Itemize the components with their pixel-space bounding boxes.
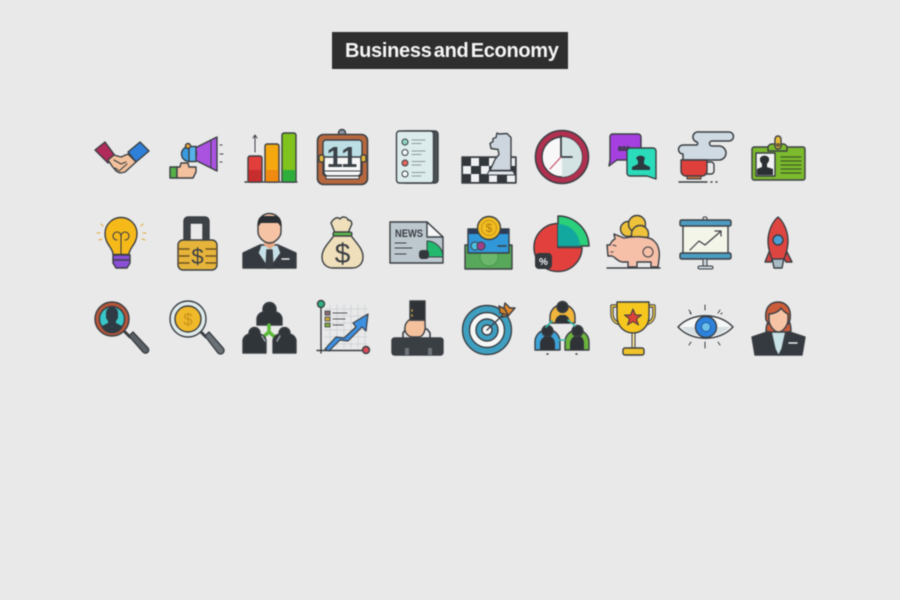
icon: light bulb — [97, 218, 146, 268]
icon: rocket — [765, 217, 792, 268]
icon: money bag — [322, 217, 363, 269]
icon: businesswoman — [752, 302, 805, 355]
icon: coffee cup — [679, 132, 734, 182]
icon: trophy — [612, 302, 654, 355]
row 2 icons — [97, 214, 792, 272]
icon: padlock — [178, 217, 217, 270]
dollar sign: $ — [183, 310, 193, 329]
icon: calendar — [318, 130, 368, 184]
icon: growth chart — [317, 300, 370, 354]
icon: credit card and cash — [465, 216, 512, 269]
icon: checklist — [396, 131, 438, 183]
news label: NEWS — [395, 228, 423, 240]
icon: piggy bank — [607, 216, 660, 268]
icon: team hierarchy — [243, 302, 296, 353]
icon: team cycle — [535, 302, 589, 354]
icon: clock — [536, 130, 588, 184]
icon: chat bubbles — [609, 134, 656, 179]
icon: presentation board — [680, 217, 731, 269]
title: Business and Economy — [345, 40, 560, 62]
icon: search dollar — [170, 301, 224, 354]
icon: briefcase in hand — [392, 301, 443, 355]
icon: megaphone — [170, 137, 223, 178]
calendar number: 11 — [327, 142, 357, 174]
row 1 icons — [95, 130, 805, 184]
icon: id badge — [752, 136, 805, 180]
icon: chess knight — [462, 133, 516, 183]
icon: bar chart — [245, 133, 297, 182]
dollar sign: $ — [191, 244, 204, 269]
row 3 icons — [95, 300, 805, 355]
icon: pie chart — [534, 216, 589, 272]
icon: handshake — [95, 142, 149, 173]
icon: eye — [678, 305, 733, 348]
icon grid — [95, 130, 805, 355]
percent label: % — [539, 257, 548, 268]
dollar sign: $ — [335, 238, 351, 269]
icon: newspaper — [390, 222, 443, 263]
title — [332, 32, 568, 69]
icon: businessman — [243, 214, 296, 268]
dollar sign: $ — [486, 221, 493, 235]
icon: target — [462, 303, 515, 354]
icon: search person — [95, 302, 149, 353]
